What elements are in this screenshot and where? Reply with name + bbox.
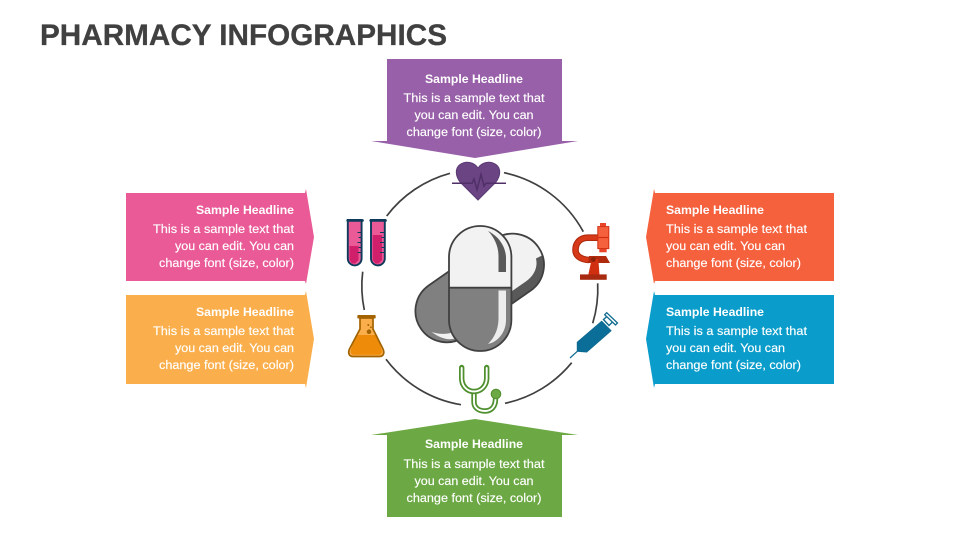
- panel: left pink callout: This is a sample text that: [153, 222, 295, 236]
- front capsule: [449, 226, 511, 351]
- icon: central capsules: [403, 221, 556, 355]
- panel: left orange callout: [126, 291, 314, 388]
- icon: syringe: [570, 313, 618, 358]
- panel: right blue callout: change font (size, color): [666, 358, 801, 372]
- icon: heart with pulse: [452, 162, 506, 200]
- panel: bottom green callout: change font (size, color): [406, 491, 542, 505]
- panel: right blue callout: Sample Headline: [666, 305, 764, 319]
- icon: microscope: [576, 223, 610, 280]
- title: PHARMACY INFOGRAPHICS: [40, 19, 447, 52]
- panel: top purple callout: Sample Headline: [425, 72, 523, 86]
- panel: top purple callout: This is a sample text that: [404, 91, 545, 105]
- panel: bottom green callout: [371, 419, 578, 517]
- icon: stethoscope: [462, 368, 501, 411]
- icon: test tubes: [346, 219, 387, 265]
- panel: left orange callout: Sample Headline: [196, 305, 294, 319]
- panel: top purple callout: you can edit. You can: [414, 108, 534, 122]
- panel: left pink callout: change font (size, color): [159, 256, 294, 270]
- panel: left orange callout: change font (size, color): [159, 358, 294, 372]
- panel: right red-orange callout: [646, 189, 834, 284]
- ring of arc segments: [362, 173, 598, 405]
- panel: right blue callout: This is a sample text that: [666, 324, 808, 338]
- panel: right red-orange callout: you can edit. You can: [666, 239, 785, 253]
- panel: left orange callout: This is a sample text that: [153, 324, 295, 338]
- panel: right blue callout: you can edit. You can: [666, 341, 785, 355]
- panel: top purple callout: [371, 59, 578, 158]
- panel: right red-orange callout: change font (size, color): [666, 256, 801, 270]
- panel: top purple callout: change font (size, color): [406, 125, 542, 139]
- panel: bottom green callout: This is a sample text that: [404, 457, 545, 471]
- panel: bottom green callout: Sample Headline: [425, 437, 523, 451]
- panel: left pink callout: Sample Headline: [196, 203, 294, 217]
- panel: left orange callout: you can edit. You can: [175, 341, 294, 355]
- icon: flask: [349, 315, 384, 356]
- back capsule: [403, 221, 556, 355]
- panel: bottom green callout: you can edit. You can: [414, 474, 534, 488]
- panel: left pink callout: you can edit. You can: [175, 239, 294, 253]
- panel: left pink callout: [126, 189, 314, 284]
- panel: right blue callout: [646, 291, 834, 388]
- panel: right red-orange callout: This is a sample text that: [666, 222, 808, 236]
- panel: right red-orange callout: Sample Headline: [666, 203, 764, 217]
